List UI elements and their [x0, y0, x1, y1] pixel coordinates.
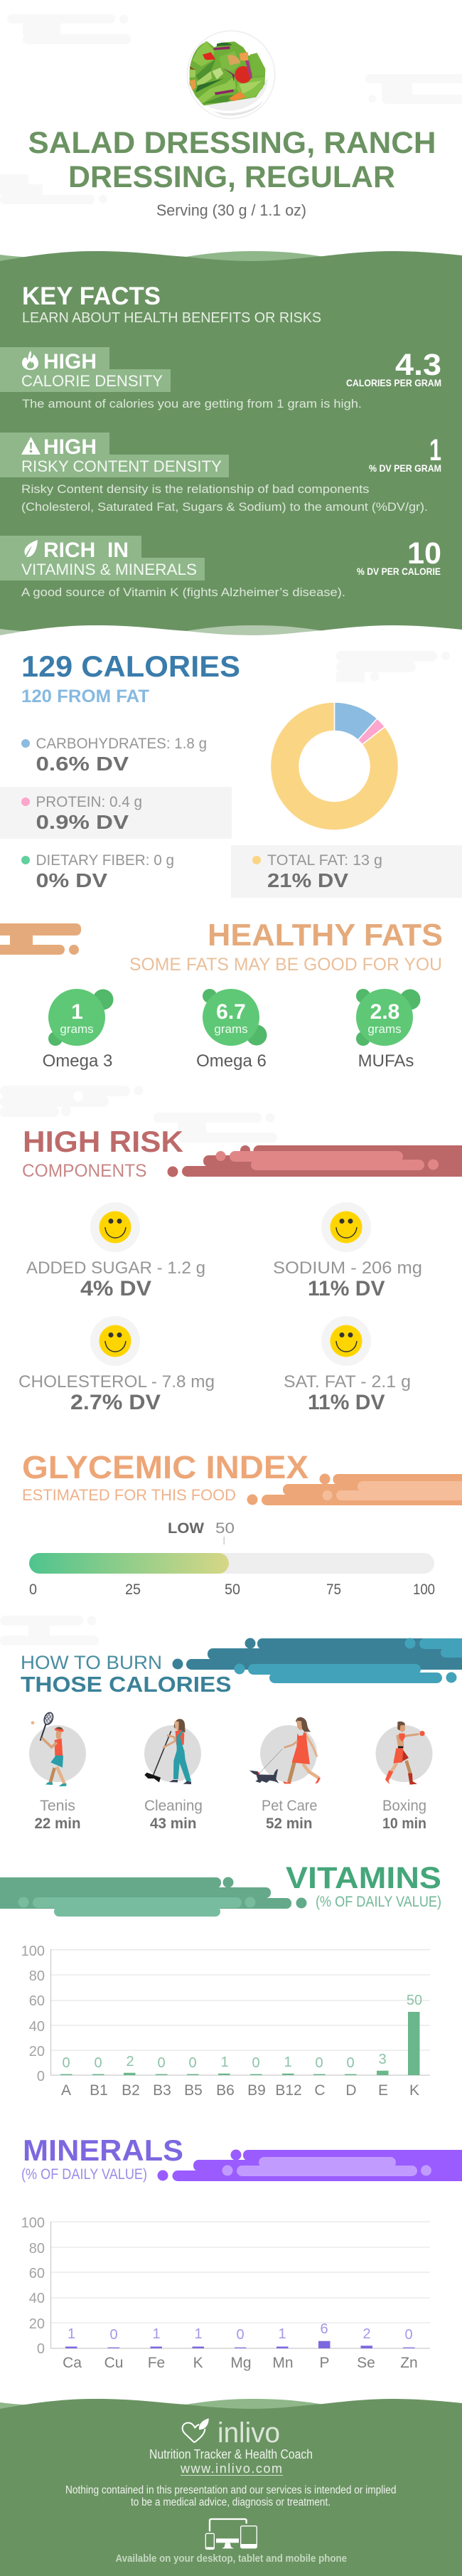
bar chart: minerals: 100 [21, 2215, 45, 2231]
legend: protein: PROTEIN: 0.4 g [36, 794, 142, 810]
panel: minerals [21, 2134, 462, 2371]
bar chart: vitamins: 0 [188, 2055, 197, 2071]
subheading: ESTIMATED FOR THIS FOOD [22, 1486, 236, 1504]
bar chart: vitamins: 40 [29, 2019, 45, 2035]
stat: omega 3: grams [60, 1022, 94, 1036]
fact: rich in vitamins and minerals: 10 [407, 536, 441, 571]
bar chart: minerals: K [193, 2355, 203, 2371]
decorative band: red [168, 1145, 462, 1177]
bar chart: minerals [21, 2215, 430, 2371]
bar chart: minerals: Mg [230, 2355, 252, 2371]
bar chart: minerals: 0 [109, 2327, 118, 2343]
fact: risky content density: HIGH [43, 435, 97, 459]
bar chart: minerals: 20 [29, 2316, 45, 2332]
fact: risky content density: 1 [429, 433, 441, 467]
bar chart: minerals: 0 [236, 2327, 245, 2343]
heading: healthy fats: HEALTHY FATS [208, 918, 443, 953]
fact: rich in vitamins and minerals: RICH IN [43, 539, 129, 562]
panel: header [28, 31, 436, 219]
legend: total fat: TOTAL FAT: 13 g [267, 852, 382, 869]
bar chart: vitamins [21, 1944, 430, 2099]
disclaimer: Nothing contained in this presentation and our services is intended or implied [65, 2484, 397, 2496]
stat: omega 3: 1 [71, 1000, 83, 1024]
bar chart: vitamins: 0 [315, 2055, 323, 2071]
legend: protein [21, 794, 142, 833]
item: saturated fat: 11% DV [308, 1391, 385, 1414]
item: added sugar: ADDED SUGAR - 1.2 g [26, 1258, 205, 1278]
bar chart: vitamins: 0 [62, 2055, 70, 2071]
stat: omega 6: grams [214, 1022, 248, 1036]
icon: warning triangle [21, 437, 41, 455]
activity: tennis [29, 1712, 86, 1832]
bar chart: vitamins: 60 [29, 1993, 45, 2009]
disclaimer [65, 2484, 397, 2508]
legend: carbohydrates: CARBOHYDRATES: 1.8 g [36, 736, 207, 752]
bar chart: minerals: P [319, 2355, 330, 2371]
fact: risky content density: (Cholesterol, Saturated Fat, Sugars & Sodium) to the amount (%DV/gr). [21, 500, 428, 514]
fact: rich in vitamins and minerals: A good source of Vitamin K (fights Alzheimer’s disease). [21, 585, 345, 599]
bar chart: minerals: 1 [152, 2326, 161, 2342]
title: DRESSING, REGULAR [68, 160, 395, 194]
website link: www.inlivo.com [180, 2461, 282, 2476]
fact: rich in vitamins and minerals [0, 536, 441, 599]
bar chart: vitamins: D [345, 2082, 357, 2099]
heading: calories: 129 CALORIES [21, 650, 240, 683]
gauge value: LOW [168, 1520, 204, 1537]
subheading: components: COMPONENTS [22, 1161, 146, 1181]
fact: calorie density: CALORIE DENSITY [21, 372, 163, 390]
activity: pet care: Pet Care [262, 1798, 317, 1814]
gauge scale: 0 [29, 1581, 37, 1598]
serving size: Serving (30 g / 1.1 oz) [156, 201, 306, 219]
stat: mufas: MUFAs [358, 1051, 414, 1071]
item: saturated fat [284, 1316, 411, 1414]
item: added sugar: 4% DV [80, 1277, 151, 1300]
bar chart: vitamins: 0 [157, 2055, 166, 2071]
gauge scale: 75 [326, 1581, 341, 1598]
item: cholesterol: CHOLESTEROL - 7.8 mg [18, 1372, 215, 1392]
panel: healthy fats [0, 918, 443, 1071]
bar chart: minerals: Ca [63, 2355, 82, 2371]
fact: calorie density: HIGH [43, 350, 97, 373]
title [28, 126, 436, 194]
legend: total fat [252, 852, 382, 891]
bar chart: vitamins: 0 [252, 2055, 260, 2071]
bar chart: minerals: Fe [148, 2355, 165, 2371]
bar chart: vitamins: 0 [94, 2055, 102, 2071]
gauge scale: 25 [125, 1581, 141, 1598]
stat: omega 3 [43, 989, 114, 1071]
item: cholesterol [18, 1316, 215, 1414]
icon: flame [22, 351, 38, 370]
bar chart: minerals: 1 [68, 2326, 75, 2342]
bar chart: vitamins: 1 [220, 2055, 229, 2070]
item: added sugar [26, 1202, 205, 1300]
icon: woman walking dog [249, 1717, 321, 1783]
stat: mufas: grams [367, 1022, 402, 1036]
bar chart: minerals: 1 [194, 2326, 203, 2342]
bar chart: vitamins: A [61, 2082, 71, 2099]
bar chart: minerals: 2 [362, 2326, 371, 2342]
fact: risky content density: RISKY CONTENT DENSITY [21, 457, 222, 475]
bar chart: minerals: 0 [37, 2341, 45, 2357]
panel: key facts [0, 251, 462, 640]
stat: omega 6 [196, 989, 267, 1071]
activity: cleaning: 43 min [150, 1816, 196, 1832]
activity: pet care [249, 1717, 321, 1832]
activity: cleaning [144, 1719, 203, 1832]
heading: vitamins: VITAMINS [286, 1861, 441, 1895]
bar chart: vitamins: 0 [37, 2069, 45, 2084]
heading: those calories: THOSE CALORIES [21, 1672, 232, 1697]
decorative band: orange [0, 923, 81, 955]
gauge value: 50 [215, 1520, 235, 1537]
bar chart: vitamins: B12 [275, 2082, 302, 2099]
bar chart: vitamins: 1 [284, 2055, 292, 2070]
bar chart: minerals: 1 [278, 2326, 286, 2342]
decorative band: purple [158, 2150, 462, 2181]
legend: dietary fiber: 0% DV [36, 869, 107, 891]
heading: minerals: MINERALS [23, 2134, 183, 2167]
fact: risky content density [0, 433, 441, 514]
stat: mufas: 2.8 [370, 1000, 399, 1024]
panel: footer [0, 2399, 462, 2576]
subheading: from fat: 120 FROM FAT [21, 687, 149, 706]
fact: calorie density [0, 347, 441, 410]
fact: calorie density: 4.3 [395, 348, 441, 382]
subheading: LEARN ABOUT HEALTH BENEFITS OR RISKS [22, 310, 321, 326]
bar chart: vitamins: 80 [29, 1968, 45, 1984]
bar chart: vitamins: B5 [184, 2082, 203, 2099]
heading: glycemic index: GLYCEMIC INDEX [22, 1449, 308, 1485]
bar chart: minerals: 60 [29, 2266, 45, 2281]
icon: devices [205, 2519, 257, 2549]
bar chart: minerals: 0 [404, 2327, 413, 2343]
bar chart: vitamins: B1 [90, 2082, 108, 2099]
donut chart [270, 702, 398, 830]
bar chart: minerals: Se [357, 2355, 375, 2371]
icon: salad bowl [187, 31, 275, 119]
heading: high risk: HIGH RISK [23, 1125, 183, 1158]
item: sodium [273, 1202, 422, 1300]
fact: calorie density: CALORIES PER GRAM [346, 378, 441, 388]
panel: how to burn calories [21, 1638, 462, 1832]
legend: carbohydrates: 0.6% DV [36, 753, 129, 775]
subheading: (% OF DAILY VALUE) [316, 1894, 441, 1910]
legend: dietary fiber: DIETARY FIBER: 0 g [36, 852, 174, 869]
bar chart: minerals: Mn [272, 2355, 294, 2371]
fact: rich in vitamins and minerals: VITAMINS & MINERALS [21, 561, 197, 578]
gauge scale: 50 [225, 1581, 240, 1598]
logo: inlivo: inlivo [217, 2417, 280, 2449]
bar chart: vitamins: B6 [216, 2082, 235, 2099]
item: sodium: SODIUM - 206 mg [273, 1258, 422, 1278]
stat: mufas [356, 989, 421, 1071]
gauge value [168, 1520, 235, 1544]
icon: boxer [385, 1722, 425, 1785]
panel: glycemic index [22, 1449, 462, 1598]
bar chart: vitamins: 100 [21, 1944, 45, 1959]
subheading: SOME FATS MAY BE GOOD FOR YOU [129, 955, 442, 975]
disclaimer: to be a medical advice, diagnosis or treatment. [131, 2496, 331, 2508]
activity: pet care: 52 min [266, 1816, 313, 1832]
bar chart: vitamins: B9 [247, 2082, 266, 2099]
bar chart: vitamins: E [378, 2082, 388, 2099]
decorative band: teal [172, 1638, 462, 1683]
fact: risky content density: Risky Content density is the relationship of bad components [21, 482, 370, 496]
decorative band: green [0, 1877, 307, 1917]
bar chart: minerals: 40 [29, 2291, 45, 2306]
item: cholesterol: 2.7% DV [70, 1391, 161, 1414]
stat: omega 6: 6.7 [216, 1000, 246, 1024]
availability note: Available on your desktop, tablet and mobile phone [115, 2553, 347, 2565]
bar chart: vitamins: 50 [407, 1993, 422, 2008]
bar chart: minerals: 6 [320, 2321, 328, 2337]
bar chart: vitamins: 3 [378, 2052, 387, 2067]
activity: boxing: 10 min [382, 1816, 426, 1832]
item: sodium: 11% DV [308, 1277, 385, 1300]
panel: vitamins [0, 1861, 441, 2099]
fact: risky content density: % DV PER GRAM [369, 463, 441, 474]
gauge scale [29, 1581, 435, 1598]
decorative band: orange [247, 1474, 462, 1505]
legend: dietary fiber [21, 852, 174, 891]
bar chart: vitamins: 0 [346, 2055, 355, 2071]
bar chart: vitamins: C [314, 2082, 326, 2099]
panel: calories [0, 650, 462, 898]
icon: person sweeping [144, 1719, 191, 1784]
icon: leaf [24, 540, 38, 557]
icon: tennis player [31, 1712, 66, 1786]
logo: inlivo [183, 2417, 280, 2449]
tagline: Nutrition Tracker & Health Coach [149, 2447, 313, 2461]
gauge scale: 100 [413, 1581, 435, 1598]
bar chart: vitamins: 2 [126, 2054, 134, 2069]
activity: tennis: Tenis [40, 1798, 75, 1814]
bar chart: vitamins: B3 [153, 2082, 171, 2099]
fact: rich in vitamins and minerals: % DV PER CALORIE [357, 566, 441, 577]
bar chart: vitamins: K [409, 2082, 419, 2099]
subheading: (% OF DAILY VALUE) [21, 2166, 147, 2183]
bar chart: minerals: Zn [400, 2355, 418, 2371]
fact: calorie density: The amount of calories you are getting from 1 gram is high. [22, 397, 362, 410]
stat: omega 3: Omega 3 [43, 1051, 112, 1071]
activity: boxing [375, 1722, 432, 1832]
activity: boxing: Boxing [382, 1798, 426, 1814]
title: SALAD DRESSING, RANCH [28, 126, 436, 160]
bar chart: vitamins: B2 [122, 2082, 140, 2099]
activity: cleaning: Cleaning [144, 1798, 203, 1814]
stat: omega 6: Omega 6 [196, 1051, 267, 1071]
bar chart: minerals: Cu [104, 2355, 123, 2371]
legend: protein: 0.9% DV [36, 811, 129, 833]
heading: how to burn: HOW TO BURN [21, 1652, 162, 1673]
legend: total fat: 21% DV [267, 869, 348, 891]
heading: key facts: KEY FACTS [22, 282, 161, 310]
gauge bar [29, 1553, 434, 1574]
legend: carbohydrates [21, 736, 207, 775]
bar chart: minerals: 80 [29, 2241, 45, 2257]
item: saturated fat: SAT. FAT - 2.1 g [284, 1372, 411, 1392]
activity: tennis: 22 min [34, 1816, 81, 1832]
panel: high risk components [18, 1125, 462, 1414]
bar chart: vitamins: 20 [29, 2044, 45, 2060]
